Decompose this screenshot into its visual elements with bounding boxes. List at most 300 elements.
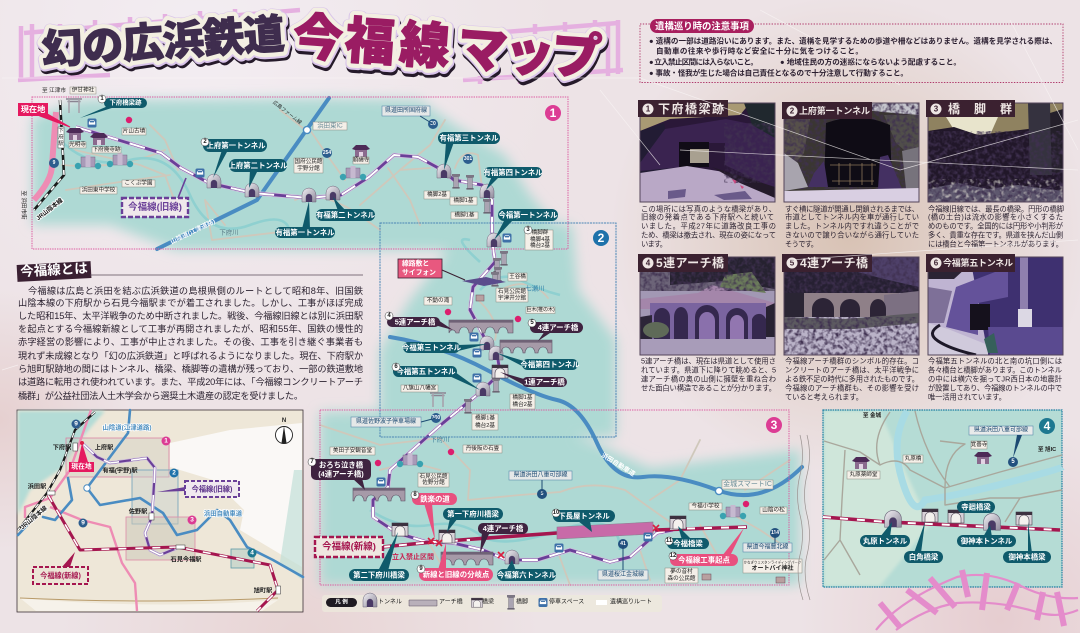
inset numbers and shields: 2 [172, 470, 176, 476]
pill: 有福第一トンネル [275, 201, 335, 238]
small map labels: 橋脚1基 [475, 414, 495, 422]
photo 6 caption: が設置してあり、今福線のトンネルの中で [928, 384, 1062, 392]
pill: おろち泣き橋: (4連アーチ橋) [318, 470, 364, 478]
compass [276, 418, 292, 444]
inset location map [17, 410, 303, 612]
pill: 鉄楽の道 [412, 493, 457, 540]
inset station labels: JR山陰本線 [19, 504, 49, 531]
panel 4 roads [824, 411, 1062, 575]
pill: 第二下府川橋梁 [349, 532, 409, 581]
photo 4 caption: 5連アーチ橋は、現在は県道として使用さ [641, 356, 776, 366]
photo 4 tab [638, 254, 728, 272]
legend: トンネル [378, 598, 402, 606]
small map labels: 橋脚群 [532, 228, 549, 236]
callout: 現在地 [18, 103, 70, 127]
photo 4 caption [641, 356, 776, 392]
callout: 現在地: 現在地 [21, 104, 45, 114]
pill: 今福橋梁 [667, 526, 709, 549]
label: 今福線(旧線): 今福線(旧線) [128, 201, 182, 213]
photo 3 tab: 3 [934, 104, 939, 114]
small map labels: 王谷橋 [509, 272, 526, 280]
pill: 下府橋梁跡 [80, 98, 147, 118]
small map labels: 丹後阪の石畳 [466, 444, 500, 452]
small map labels: 下府川 [219, 228, 239, 236]
panel numbers: 2 [598, 231, 605, 245]
intro body text: を起点とする今福線新線として工事が再開されましたが、昭和55年、国鉄の慢性的 [18, 323, 363, 334]
small map labels: 山陰の松 [762, 506, 785, 514]
small map labels: 巨木(椎の木) [526, 306, 555, 313]
intro body text: 今福線は広島と浜田を結ぶ広浜鉄道の島根県側のルートとして昭和8年、旧国鉄 [28, 285, 363, 296]
photo 2 tab [782, 102, 872, 119]
photo 5 tab: 5 [790, 258, 795, 268]
photo 6 tab [926, 254, 1015, 272]
numbered markers: 6 [394, 364, 398, 370]
photo 6 caption: 今福第五トンネルの北と南の坑口側には [928, 356, 1062, 366]
route shields: 41 [620, 541, 626, 547]
inset numbers and shields: 9 [74, 420, 78, 428]
small map labels: 橋台2基 [475, 421, 495, 429]
route shields: 50 [430, 121, 436, 127]
pill: 新線と旧線の分岐点 [419, 543, 493, 581]
small map labels: 至 江津市 [42, 86, 66, 94]
photo 2 tab: 2 [790, 106, 795, 116]
small map labels: 不動の滝 [427, 296, 450, 304]
title: 今福線マップ: 今福線マップ [291, 9, 603, 86]
title: 幻の広浜鉄道: 幻の広浜鉄道 [40, 11, 286, 73]
inset station labels: 浜田駅 [28, 482, 47, 490]
small map labels: 石見公民館 [420, 472, 448, 480]
photo 3 tab [926, 100, 1015, 117]
numbered markers: 8 [413, 492, 417, 498]
pill: 今福第一トンネル: 今福第一トンネル [499, 210, 558, 220]
intro body text: 赤字経営の影響により、工事が中止されました。その後、工事を引き継ぐ事業者も [18, 336, 363, 347]
inset station labels: 浜田自動車道 [204, 508, 243, 518]
photo 1: 下府橋梁跡 [640, 103, 775, 202]
decorative rail behind title [18, 9, 623, 84]
inset station labels: 上府駅 [95, 444, 114, 452]
notice heading pill: 遺構巡り時の注意事項 [655, 20, 749, 32]
paper creases [2, 10, 1078, 370]
legend: 遺構巡りルート [610, 598, 652, 606]
notice lines: 自動車の往来や歩行時など安全に十分に気をつけること。 [656, 46, 863, 56]
small map labels: 浜田東中学校 [82, 186, 116, 194]
intro body text: 山陰本線の下府駅から石見今福駅までが着工されました。しかし、工事がほぼ完成 [18, 297, 363, 308]
photo 1 caption: いました。平成27年に道路改良工事の [641, 222, 776, 230]
pill: 今福第五トンネル: 今福第五トンネル [397, 367, 456, 376]
pill: 1連アーチ橋 [500, 372, 567, 387]
small map labels: 美田子安観音堂 [333, 446, 372, 454]
small map labels [20, 86, 802, 583]
pill: 今福第五トンネル [393, 366, 480, 390]
pill: 有福第四トンネル [484, 167, 543, 190]
photo 4: 5連アーチ橋 [640, 257, 775, 355]
road name signs: 県道田所国府線 [385, 106, 427, 114]
panel 4 pills [860, 501, 1051, 563]
small map labels: 国府公民館 [295, 157, 323, 165]
inset terrain [18, 411, 302, 611]
panel 4 labels: 覚善寺 [971, 440, 988, 448]
road name signs: 県道浜田八重可部線 [513, 470, 568, 478]
intro body text [18, 285, 363, 401]
pill: 今福第一トンネル [494, 209, 558, 240]
inset numbers and shields: 4 [250, 550, 254, 556]
intro body text: 橋群」が公益社団法人土木学会から選奨土木遺産の認定を受けました。 [18, 390, 303, 401]
map teal terrain [32, 98, 800, 585]
decorative rail bottom right [876, 570, 1078, 630]
photo 4 caption: 連アーチ橋の奥の山側に擁壁を重ね合わ [641, 374, 776, 384]
photo 4 caption: せた面白い構造であることが分かります。 [641, 384, 776, 392]
numbered markers [98, 95, 677, 573]
photo 2 caption [785, 204, 919, 248]
photo 5 caption: ンクリートのアーチ橋は、太平洋戦争に [785, 366, 919, 374]
pill: おろち泣き橋: おろち泣き橋 [319, 460, 364, 470]
pink national road 9 [34, 112, 56, 200]
label: 今福線(新線) [315, 537, 383, 557]
small map labels: JR山陰本線 [34, 196, 64, 222]
inset station labels: 山陰道(江津道路) [102, 422, 152, 432]
pill: 5連アーチ橋 [387, 317, 453, 330]
photo 3 tab: 橋 脚 群 [948, 101, 1012, 116]
title: 今福線マップ: 今福線マップ [291, 9, 603, 86]
small map labels: 浜田自動車道 [600, 450, 638, 478]
numbered markers: 3 [526, 227, 530, 233]
notice lines: ● 遺構の一部は道路沿いにあります。また、遺構を見学するための歩道や柵などはありません。遺構を見学される際は、 [649, 36, 1057, 46]
photo 3 caption: 今福線旧線では、最長の橋梁。円形の橋脚 [928, 204, 1064, 214]
route shields: 300 [432, 415, 440, 421]
inset label: 今福線(旧線) [157, 481, 239, 497]
pill: 5連アーチ橋: 5連アーチ橋 [395, 318, 436, 326]
pill: 今福橋梁: 今福橋梁 [673, 539, 703, 548]
teal pill labels [80, 98, 709, 581]
photo 2 caption: ました。トンネル内ですれ違うことがで [785, 222, 919, 230]
pill: 上府第一トンネル [203, 139, 267, 178]
pill: 上府第二トンネル: 上府第二トンネル [229, 161, 288, 170]
small map labels: こくぶ学園 [125, 178, 153, 186]
inset label: 今福線(旧線): 今福線(旧線) [192, 484, 233, 494]
photo 1 caption: 旧線の発着点である下府駅へと続いて [641, 212, 774, 222]
panel 4 labels: 県道浜田八重可部線 [974, 426, 1028, 434]
panel frame 3 [320, 410, 789, 585]
pill: 今福第四トンネル [497, 353, 580, 370]
pill: 4連アーチ橋 lower: 4連アーチ橋 [483, 524, 524, 533]
inset station labels: 石見今福駅 [171, 556, 202, 564]
small map labels: 夢の音村 [670, 567, 693, 575]
legend: 凡 例 [335, 598, 348, 606]
photo 4 tab: 5連アーチ橋 [656, 255, 724, 270]
pill: 上府第一トンネル: 上府第一トンネル [207, 141, 266, 150]
panel 4 icons [852, 452, 1032, 530]
numbered markers: 12 [670, 553, 677, 559]
roads [62, 110, 790, 585]
pill: 上府第二トンネル [229, 159, 288, 188]
numbered markers: 5 [530, 320, 534, 326]
pill: 今福線工事起点: 今福線工事起点 [678, 556, 730, 564]
photo 5 caption: 今福線のアーチ橋群も、その影響を受け [785, 384, 919, 392]
panel 4 pills: 丸原トンネル [863, 536, 908, 546]
photo 5 tab [782, 254, 872, 272]
small map labels: 今福小学校 [692, 502, 720, 510]
label: 今福線(旧線) [122, 178, 188, 217]
panel 4 labels: 丸原橋 [905, 454, 922, 462]
photo 1 tab [638, 100, 728, 117]
notice lines: ● 事故・怪我が生じた場合は自己責任となるので十分注意して行動すること。 [649, 68, 908, 78]
small map labels: 石見公民館 [498, 287, 526, 295]
photo 6: 今福第五トンネル [928, 257, 1063, 355]
intro body text: 現れず未成線となり「幻の広浜鉄道」と呼ばれるようになりました。現在、下府駅か [18, 350, 363, 361]
panel 4 river [897, 411, 1062, 507]
panel 4 number: 4 [1044, 419, 1051, 433]
panel 4 pills: 寺廻橋梁 [961, 502, 991, 512]
photo 5 caption: よる鉄不足の時代に多用されたものです。 [785, 374, 919, 384]
small map labels: 橋脚4基 [530, 235, 550, 243]
pill: 今福第三トンネル: 今福第三トンネル [402, 343, 462, 352]
small map labels: 山陰道(江津道路) [169, 216, 217, 246]
inset zones [66, 438, 254, 568]
legend: アーチ橋 [439, 598, 463, 606]
small map labels: 橋台2基 [530, 241, 550, 249]
pill: 第二下府川橋梁: 第二下府川橋梁 [353, 570, 405, 580]
numbered markers: 2 [203, 139, 207, 145]
photo 3 caption: 多く、貴重な存在です。県道を挟んだ山側 [928, 230, 1063, 240]
pill: 下長屋トンネル [553, 510, 615, 532]
inset station labels: 有福(宇野)駅 [102, 466, 138, 474]
inset numbers and shields [72, 420, 256, 558]
notice box [640, 19, 1063, 82]
small map labels: 至 浜田市街 [20, 190, 28, 220]
pill: 有福第四トンネル: 有福第四トンネル [484, 168, 543, 177]
title: 幻の広浜鉄道: 幻の広浜鉄道 [41, 12, 286, 74]
small map labels: 八旗山八幡宮 [403, 384, 437, 392]
inset station labels: 旭町駅 [254, 586, 273, 594]
small map labels: 橋脚1基 [454, 196, 474, 204]
numbered markers: 1 [100, 96, 104, 102]
pill: 下府橋梁跡: 下府橋梁跡 [110, 98, 142, 106]
inset station labels: 佐野駅 [129, 508, 148, 516]
inset callout: 現在地 [69, 443, 94, 472]
small map labels: 広島ファーム線 [271, 99, 303, 126]
photo 2: 上府第一トンネル [784, 103, 919, 202]
section heading: 今福線とは: 今福線とは [20, 260, 89, 279]
small map labels: 宇野分館 [297, 164, 320, 172]
intro body text: した昭和15年、太平洋戦争のため中断されました。戦後、今福線旧線とは別に浜田駅 [18, 310, 363, 321]
road name signs: 県道佐野波子停車場線 [356, 417, 416, 425]
inset callout: 現在地: 現在地 [71, 462, 92, 470]
small map labels: 片山古墳 [123, 126, 146, 134]
panel numbers: 3 [771, 418, 778, 432]
small map labels: 橋台2基 [513, 400, 533, 408]
main route map [18, 86, 810, 600]
intro body text: ら旭町駅跡地の間にはトンネル、橋梁、橋脚等の遺構が残っており、一部の鉄道敷地 [18, 363, 363, 374]
expressway [157, 98, 802, 495]
purple pill labels [311, 317, 583, 553]
label: 線路敷とサイフォン [398, 258, 465, 280]
wavy cut lines [798, 435, 810, 600]
photo 3 caption: には橋台と今福第一トンネルがあります。 [928, 240, 1063, 248]
panel frame 1 [32, 97, 568, 249]
photo 6 tab: 6 [934, 258, 939, 268]
pill: 新線と旧線の分岐点: 新線と旧線の分岐点 [423, 570, 490, 579]
small map labels: 七瀬川 [525, 284, 545, 292]
panel frame 2 [380, 223, 616, 437]
photo 4 caption: れています。県道下に降りて眺めると、5 [641, 366, 776, 374]
photo 5 caption: ていると考えられます。 [785, 392, 863, 402]
panel 4 labels [847, 411, 1056, 479]
inset numbers and shields: 1 [164, 438, 168, 444]
small map labels: 下 [58, 127, 64, 134]
small map labels: 駅 [58, 140, 64, 147]
small map labels: かなぎウェスタンライディングパーク [744, 560, 801, 564]
pill: 今福第三トンネル [402, 342, 487, 353]
panel 4 labels: 至 金城 [863, 411, 882, 419]
inset station labels: 下府駅 [53, 444, 72, 452]
panel 4 labels: 丸原薬師堂 [850, 470, 878, 478]
old line route [76, 127, 673, 562]
pill: 有福第二トンネル [316, 197, 376, 221]
photo 1 caption: ため、橋梁は撤去され、現在の姿になって [641, 230, 776, 240]
intro body text: は道路に転用され使われています。また、平成20年には、「今福線コンクリートアーチ [18, 376, 363, 387]
inset roads and lines [18, 410, 303, 611]
route shields: 301 [464, 156, 472, 162]
route shields: 9 [53, 160, 56, 166]
small map labels: 宇津井分館 [498, 294, 526, 302]
legend: 橋脚 [516, 598, 528, 606]
pill: 4連アーチ橋 [530, 322, 583, 341]
photo 5 tab: 4連アーチ橋 [800, 255, 868, 270]
small map labels: 森の公民館 [668, 574, 696, 582]
numbered markers: 11 [666, 538, 673, 544]
label: 線路敷とサイフォン: サイフォン [402, 268, 436, 276]
photo 2 caption: 市道としてトンネル内を車が通行してい [785, 212, 919, 222]
photo 1 caption [641, 204, 776, 248]
panel 4 red line [823, 517, 1060, 530]
inset numbers and shields: 3 [190, 516, 194, 524]
photo 3 caption [928, 204, 1064, 248]
photo 6 caption [928, 356, 1063, 402]
numbered markers: 4 [387, 313, 391, 319]
pill: おろち泣き橋 [311, 459, 371, 490]
pill: 第一下府川橋梁 [443, 508, 503, 532]
label: 今福線(新線): 今福線(新線) [322, 540, 376, 552]
rivers [60, 140, 620, 550]
road name signs [351, 106, 792, 580]
photo 5 caption [785, 356, 919, 402]
title: 今福線マップ: 今福線マップ [292, 13, 604, 90]
label: 立入禁止区間: 立入禁止区間 [392, 552, 434, 561]
compass: N [282, 418, 286, 424]
photo 2 caption: そうです。 [785, 240, 818, 248]
photo 1 tab: 下府橋梁跡 [658, 101, 724, 116]
inset label: 今福線(新線): 今福線(新線) [40, 571, 81, 580]
photo 1 caption: この場所には写真のような橋梁があり、 [641, 204, 776, 214]
notice lines [649, 36, 1057, 78]
photo 6 caption: 唯一活用されています。 [928, 392, 1006, 402]
small map labels: 府 [58, 134, 64, 140]
pill: 今福線工事起点 [670, 528, 744, 566]
pill: 有福第一トンネル: 有福第一トンネル [276, 228, 335, 237]
panel 4 pills: 御神本橋梁 [1009, 552, 1046, 562]
photo 1 tab: 1 [646, 104, 651, 114]
panel numbers: 1 [550, 106, 557, 120]
panel numbers [545, 105, 782, 433]
pill: 今福第六トンネル [497, 560, 557, 581]
panel 4 pills: 白角橋梁 [909, 552, 939, 562]
pill: 第一下府川橋梁: 第一下府川橋梁 [447, 510, 499, 518]
numbered markers: 9 [419, 566, 423, 572]
pill: 有福第二トンネル: 有福第二トンネル [316, 210, 376, 220]
route shields: 254 [323, 150, 331, 156]
pill: 4連アーチ橋: 4連アーチ橋 [538, 323, 579, 332]
photo 3: 橋脚群 [928, 103, 1063, 202]
inset label: 今福線(新線) [33, 552, 88, 584]
small map labels: 金城スマートIC [723, 479, 772, 488]
photo 1 caption: います。 [641, 240, 667, 248]
pill: 有福第三トンネル [438, 132, 500, 170]
photo 6 tab: 今福第五トンネル [943, 257, 1013, 268]
inset station labels [19, 422, 273, 594]
photo 2 tab: 上府第一トンネル [799, 105, 870, 116]
title: 幻の広浜鉄道: 幻の広浜鉄道 [40, 11, 286, 73]
small map labels: 橋脚2基 [427, 190, 447, 198]
pill: 下長屋トンネル: 下長屋トンネル [558, 512, 610, 520]
icons on the map [66, 99, 785, 583]
legend: 橋梁 [482, 598, 494, 606]
route shields [49, 119, 780, 549]
pill: 今福第六トンネル: 今福第六トンネル [497, 570, 557, 580]
photo 3 caption: (橋の土台)は流水の影響を小さくするた [928, 212, 1063, 222]
title with rail frame [18, 9, 623, 90]
legend [322, 593, 662, 612]
photo 2 caption: きないので譲り合いながら通行していた [785, 230, 919, 240]
panel 4 number [1039, 418, 1055, 434]
title: 幻の広浜鉄道: 幻の広浜鉄道 [42, 14, 288, 76]
small map labels: 橋脚1基 [513, 393, 533, 401]
small map labels: 橋脚1基 [455, 210, 475, 218]
panel 4 labels: 至 旭IC [1038, 445, 1056, 453]
notice lines: ● 地域住民の方の迷惑にならないよう配慮すること。 [780, 56, 961, 66]
pill: 1連アーチ橋: 1連アーチ橋 [524, 378, 565, 386]
JR line [34, 100, 64, 210]
numbered markers: 10 [553, 510, 560, 516]
photo 5 caption: 今福線アーチ橋群のシンボル的存在。コ [785, 356, 919, 366]
numbered markers: 7 [310, 459, 314, 465]
route shields: 114 [771, 530, 779, 536]
panel 4 map [823, 410, 1062, 587]
pill: 有福第三トンネル: 有福第三トンネル [440, 134, 499, 142]
notice lines: ● 立入禁止区間には入らないこと。 [649, 56, 758, 66]
photo 2 caption: すぐ横に隧道が開通し閉鎖されるまでは、 [785, 204, 919, 214]
small map labels: オートバイ神社 [751, 564, 794, 572]
road name signs: 県道今福豊北線 [746, 542, 789, 550]
photo 6 caption: 各々橋台と橋脚があります。このトンネル [928, 366, 1062, 374]
route shields: 5 [541, 491, 544, 497]
small map labels: 佐野分館 [422, 478, 445, 486]
title: 今福線マップ: 今福線マップ [291, 10, 603, 87]
road name signs: 県道桜江金城線 [602, 570, 644, 578]
panel 4 pills: 御神本トンネル [961, 536, 1013, 546]
photo 3 caption: めのものです。全国的には円形や小判形が [928, 222, 1064, 230]
small map labels: 浜田東IC [317, 120, 343, 130]
small map labels: 順禱寺 [353, 156, 370, 164]
panel 4 labels: 5 [1011, 459, 1015, 465]
inset numbers and shields: 9 [81, 520, 85, 526]
legend: 停車スペース [549, 598, 584, 606]
small map labels: 下府川 [430, 436, 450, 444]
photo 4 tab: 4 [646, 258, 651, 268]
label: 線路敷とサイフォン: 線路敷と [402, 258, 429, 268]
small map labels: 伊甘神社 [72, 86, 95, 94]
hatched tunnel [557, 522, 653, 539]
pill: 4連アーチ橋 lower [478, 523, 528, 553]
